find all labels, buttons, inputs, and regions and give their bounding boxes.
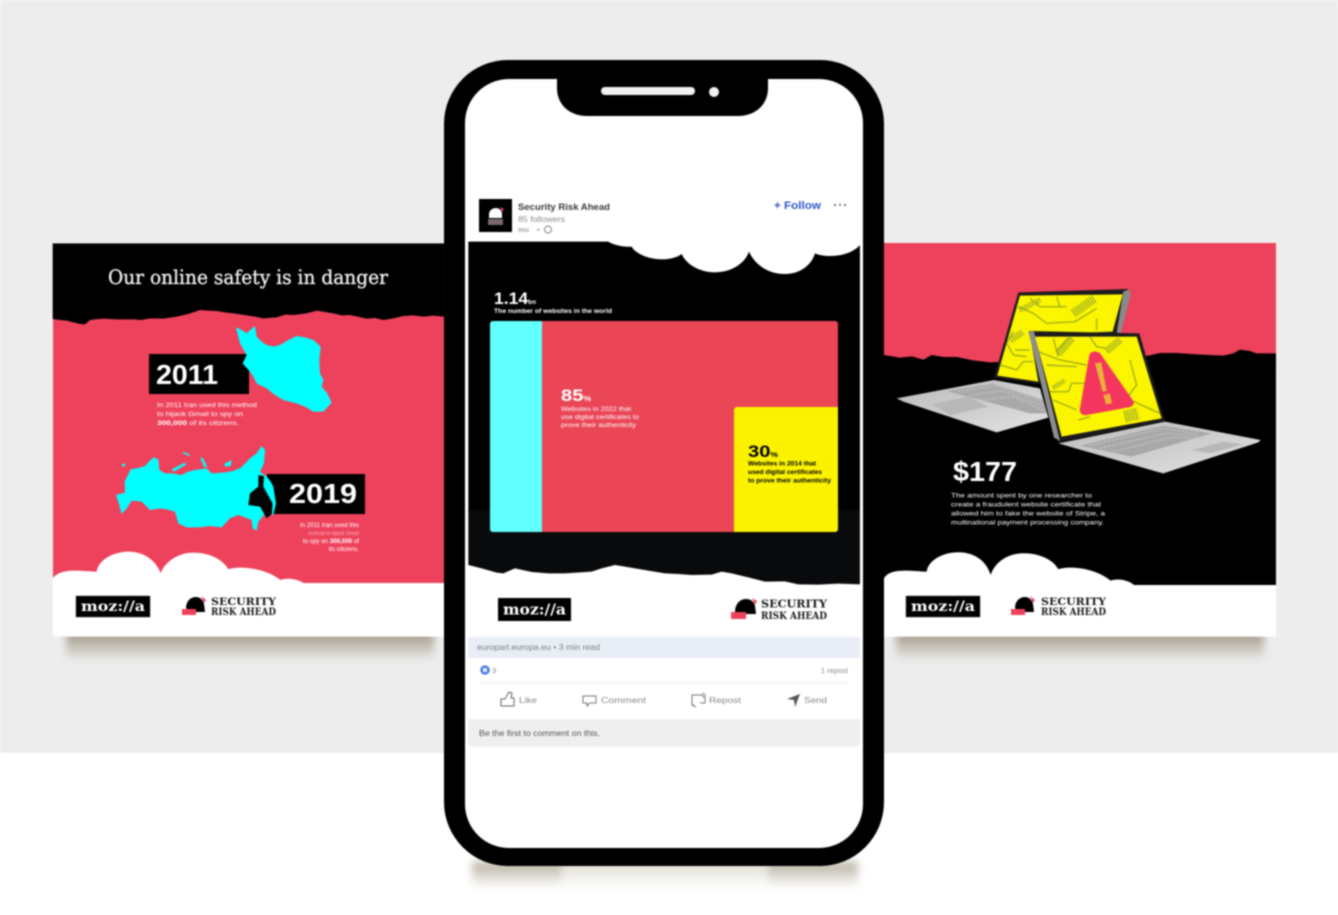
label 30%: to prove their authenticity (748, 478, 832, 484)
panel: our online safety is in danger (53, 243, 445, 637)
logo: mozilla: moz://a (503, 600, 566, 618)
post image: black panel with clouds and torn edge (468, 242, 860, 585)
text block 2019: method to hijack Gmail (308, 531, 359, 537)
post age (518, 226, 552, 234)
text block: $177: create a fraudulent website certificate that (951, 502, 1101, 508)
reactions row: 3 (492, 666, 496, 675)
logo: mozilla (906, 596, 980, 617)
year label 2019 (267, 474, 365, 514)
phone (444, 60, 884, 866)
logo: security risk ahead: RISK AHEAD (1041, 607, 1106, 618)
text block 2011: In 2011 Iran used this method (157, 402, 258, 409)
logo: mozilla (498, 598, 571, 621)
post: linkedin card (467, 190, 861, 747)
logo: security risk ahead: SECURITY (1041, 596, 1107, 608)
link bar: europarl.europa.eu • 3 min read (477, 643, 600, 652)
action: comment (583, 695, 647, 706)
year label 2011 (149, 354, 249, 394)
more menu (834, 204, 846, 206)
action: like (501, 692, 537, 706)
text block 2019: to spy on 300,000 of (303, 538, 359, 545)
followers: 85 followers (518, 215, 565, 224)
label 85%: prove their authenticity (561, 422, 637, 429)
illustration: two laptops (897, 289, 1261, 473)
post age: /mo (518, 227, 529, 234)
logo: security risk ahead: SECURITY (761, 598, 827, 610)
logo: mozilla: moz://a (81, 599, 145, 615)
panel shadows (66, 632, 1264, 662)
logo: security risk ahead (1011, 596, 1107, 618)
follow button: + Follow (774, 200, 821, 212)
phone screen (465, 79, 863, 848)
reactions row (480, 665, 849, 675)
post age: • (537, 227, 540, 234)
stat: 1.14 bn: 1.14 bn (494, 290, 536, 308)
action: comment: Comment (601, 695, 647, 705)
logo: security risk ahead: SECURITY (211, 596, 277, 608)
link bar (468, 637, 860, 658)
logo: security risk ahead (182, 596, 277, 618)
label 85%: use digital certificates to (561, 414, 640, 421)
text block 2011: to hijack Gmail to spy on (157, 411, 244, 418)
text block: $177: multinational payment processing company. (951, 520, 1104, 526)
notch (548, 70, 778, 116)
label 85% (561, 387, 640, 429)
year label 2011: 2011 (156, 359, 218, 390)
logo: security risk ahead (731, 598, 827, 622)
title: Our online safety is in danger (108, 265, 388, 289)
warning triangle (1080, 351, 1134, 415)
chart: nested area (490, 321, 838, 532)
action: repost (692, 693, 742, 707)
label 85%: Websites in 2022 that (561, 406, 631, 413)
action: repost: Repost (709, 695, 742, 705)
label 30%: 30 % (748, 443, 779, 461)
text block 2011 (157, 402, 258, 427)
speaker and camera (601, 87, 719, 97)
action: send: Send (804, 695, 827, 705)
map: Iran (236, 326, 332, 412)
action: like: Like (519, 695, 537, 705)
back laptop (897, 289, 1131, 432)
stat: 1.14 bn (494, 290, 612, 315)
text block 2019 (300, 522, 359, 553)
label 30% (748, 443, 832, 484)
torn black header (53, 243, 444, 324)
phone shadow (472, 862, 858, 892)
phone body (444, 60, 884, 866)
comment prompt (468, 719, 860, 747)
comment prompt: Be the first to comment on this. (479, 729, 600, 738)
text block 2019: In 2011 Iran used this (300, 522, 359, 529)
action: send (787, 694, 827, 707)
label 85%: 85 % (561, 387, 592, 405)
panel: $177 laptops (884, 243, 1276, 637)
text block: $177 (951, 492, 1105, 526)
logo: mozilla (76, 596, 150, 617)
divider (479, 682, 848, 683)
text block: $177: The amount spent by one researcher to (951, 492, 1092, 500)
avatar (479, 199, 512, 232)
map: Russia (116, 446, 276, 531)
logo: mozilla: moz://a (911, 599, 975, 615)
year label 2019: 2019 (289, 478, 357, 509)
text block 2019: its citizens. (329, 546, 359, 553)
logo: security risk ahead: RISK AHEAD (211, 607, 276, 618)
front laptop (1028, 331, 1261, 473)
logo: security risk ahead: RISK AHEAD (761, 610, 827, 622)
reactions row: 1 repost (821, 666, 849, 675)
text block: $177: allowed him to fake the website of Stripe, a (951, 510, 1105, 518)
label 30%: used digital certificates (748, 469, 823, 476)
stat: 1.14 bn: The number of websites in the world (494, 309, 612, 315)
text block 2011: 300,000 of its citizens. (157, 420, 239, 427)
clouds (884, 552, 1276, 637)
clouds (53, 552, 444, 637)
label 30%: Websites in 2014 that (748, 460, 816, 468)
torn black section (884, 350, 1276, 585)
amount: $177: $177 (953, 456, 1017, 487)
author name: Security Risk Ahead (518, 202, 610, 212)
